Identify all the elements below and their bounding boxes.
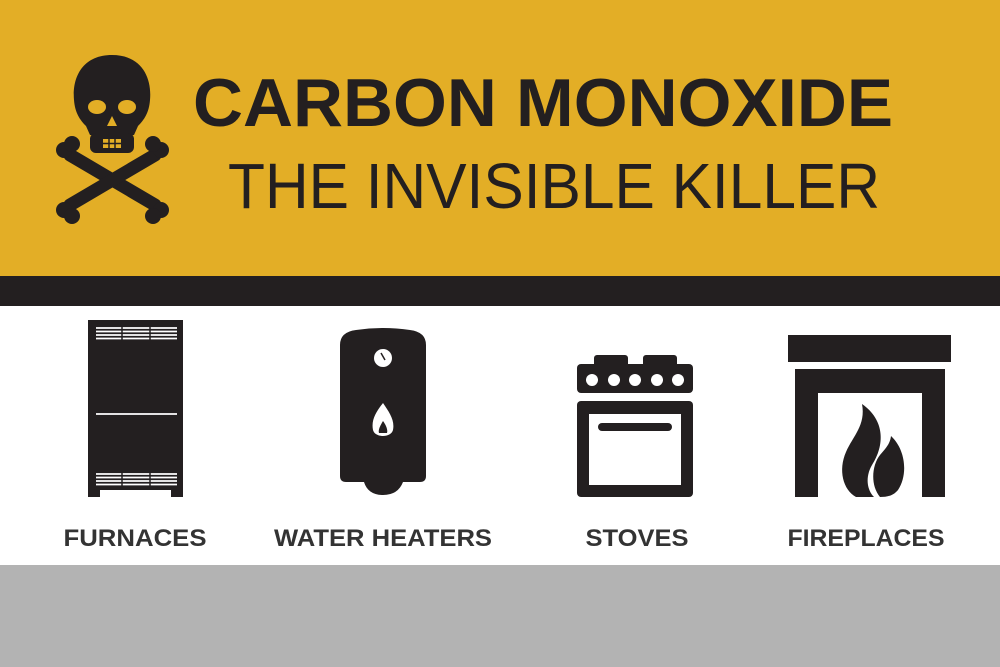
label: water heaters: WATER HEATERS bbox=[274, 525, 492, 552]
gray footer bbox=[0, 565, 1000, 667]
icon: water heater bbox=[340, 328, 426, 495]
label: fireplaces: FIREPLACES bbox=[788, 525, 944, 552]
black band bbox=[0, 276, 1000, 306]
icon: stove bbox=[577, 355, 693, 497]
label: stoves: STOVES bbox=[586, 525, 688, 552]
icon: fireplace bbox=[788, 335, 951, 497]
icon: skull and crossbones bbox=[56, 55, 169, 224]
subtitle: THE INVISIBLE KILLER bbox=[228, 150, 880, 222]
label: furnaces: FURNACES bbox=[64, 525, 206, 552]
title: CARBON MONOXIDE bbox=[193, 65, 893, 141]
header banner bbox=[0, 0, 1000, 276]
icon: furnace bbox=[88, 320, 183, 498]
